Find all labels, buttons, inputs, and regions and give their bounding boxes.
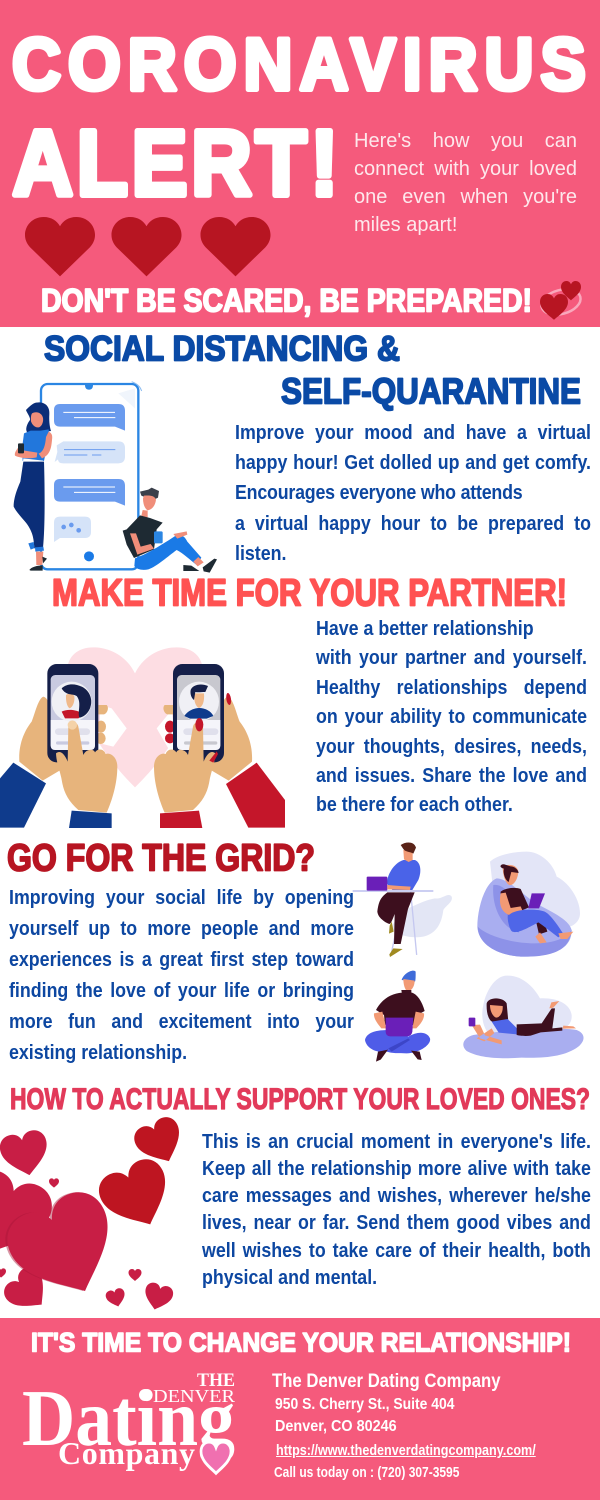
- left hand and phone: [0, 664, 117, 828]
- intro text: [354, 130, 577, 236]
- illustration: scattered hearts: [0, 1113, 190, 1320]
- body text: social life: existing relationship.: [9, 1042, 187, 1064]
- body text: better relationship: on your ability to communicate: [316, 706, 587, 728]
- body text: virtual happy hour: listen.: [235, 543, 286, 565]
- heading: social distancing: SOCIAL DISTANCING &: [44, 330, 400, 368]
- body text: crucial moment: physical and mental.: [202, 1267, 377, 1289]
- body text: virtual happy hour: a virtual happy hour to be prepared to: [235, 513, 591, 535]
- intro text: miles apart!: [354, 214, 457, 236]
- subtitle: be prepared: DON'T BE SCARED, BE PREPARED!: [41, 282, 532, 318]
- body text: social life: more fun and excitement into your: [9, 1010, 354, 1032]
- company name: The Denver Dating Company: [272, 1371, 501, 1392]
- man sitting: [123, 488, 217, 573]
- phone: [41, 382, 142, 569]
- body text: social life: finding the love of your life or bringing: [9, 980, 354, 1002]
- intro text: connect with your loved: [354, 158, 577, 180]
- illustration: hands holding phones: [0, 647, 285, 828]
- header band: [0, 0, 600, 327]
- body text: better relationship: Have a better relationship: [316, 618, 534, 640]
- contact details: [272, 1371, 536, 1481]
- intro text: Here's how you can: [354, 130, 577, 152]
- woman on beanbag: [477, 852, 580, 957]
- logo: the denver dating company: Company: [58, 1435, 195, 1471]
- title: coronavirus: CORONAVIRUS: [12, 23, 586, 105]
- body text: crucial moment: lives, near or far. Send them good vibes and: [202, 1212, 591, 1234]
- illustration: four people with devices: [353, 843, 584, 1062]
- body text: crucial moment: [202, 1130, 591, 1289]
- body text: better relationship: your thoughts, desires, needs,: [316, 736, 587, 758]
- woman lying on mattress: [463, 976, 584, 1058]
- body text: social life: yourself up to more people and more: [9, 918, 354, 940]
- logo: the denver dating company: DENVER: [153, 1386, 235, 1406]
- body text: better relationship: and issues. Share the love and: [316, 765, 587, 787]
- body text: social life: [9, 886, 354, 1064]
- illustration: phone with two people chatting: [14, 382, 217, 573]
- footer band: [0, 1318, 600, 1500]
- body text: crucial moment: This is an crucial moment in everyone's life.: [202, 1130, 591, 1152]
- title: alert: ALERT!: [12, 111, 338, 215]
- intro text: one even when you're: [354, 186, 577, 208]
- body text: better relationship: Healthy relationships depend: [316, 677, 587, 699]
- man cross-legged: [365, 971, 430, 1062]
- right hand and phone: [154, 664, 285, 828]
- body text: crucial moment: Keep all the relationship more alive with take: [202, 1158, 591, 1180]
- logo: the denver dating company: Dating: [22, 1375, 235, 1463]
- phone number: Call us today on : (720) 307-3595: [274, 1464, 459, 1481]
- man at table: [353, 843, 452, 957]
- icon: two hearts with ring: [539, 281, 583, 320]
- body text: better relationship: [316, 618, 587, 816]
- body text: virtual happy hour: happy hour! Get dolled up and get comfy.: [235, 452, 591, 474]
- body text: virtual happy hour: Encourages everyone who attends: [235, 482, 522, 504]
- body text: virtual happy hour: [235, 422, 591, 565]
- body text: better relationship: be there for each other.: [316, 794, 513, 816]
- woman standing: [14, 402, 52, 571]
- icon: three hearts: [25, 217, 271, 276]
- body text: better relationship: with your partner and yourself.: [316, 647, 587, 669]
- body text: virtual happy hour: Improve your mood and have a virtual: [235, 422, 591, 444]
- address line 2: Denver, CO 80246: [275, 1418, 397, 1435]
- heading: go for the grid: GO FOR THE GRID?: [7, 838, 315, 880]
- body text: crucial moment: care messages and wishes, wherever he/she: [202, 1185, 591, 1207]
- body text: social life: Improving your social life by opening: [9, 886, 354, 908]
- body text: social life: experiences is a great first step toward: [9, 948, 354, 970]
- logo: the denver dating company: THE: [197, 1370, 235, 1391]
- website link: https://www.thedenverdatingcompany.com/: [276, 1442, 536, 1459]
- body text: crucial moment: well wishes to take care of their health, both: [202, 1240, 591, 1262]
- pale heart: [67, 647, 203, 787]
- address line 1: 950 S. Cherry St., Suite 404: [275, 1396, 455, 1413]
